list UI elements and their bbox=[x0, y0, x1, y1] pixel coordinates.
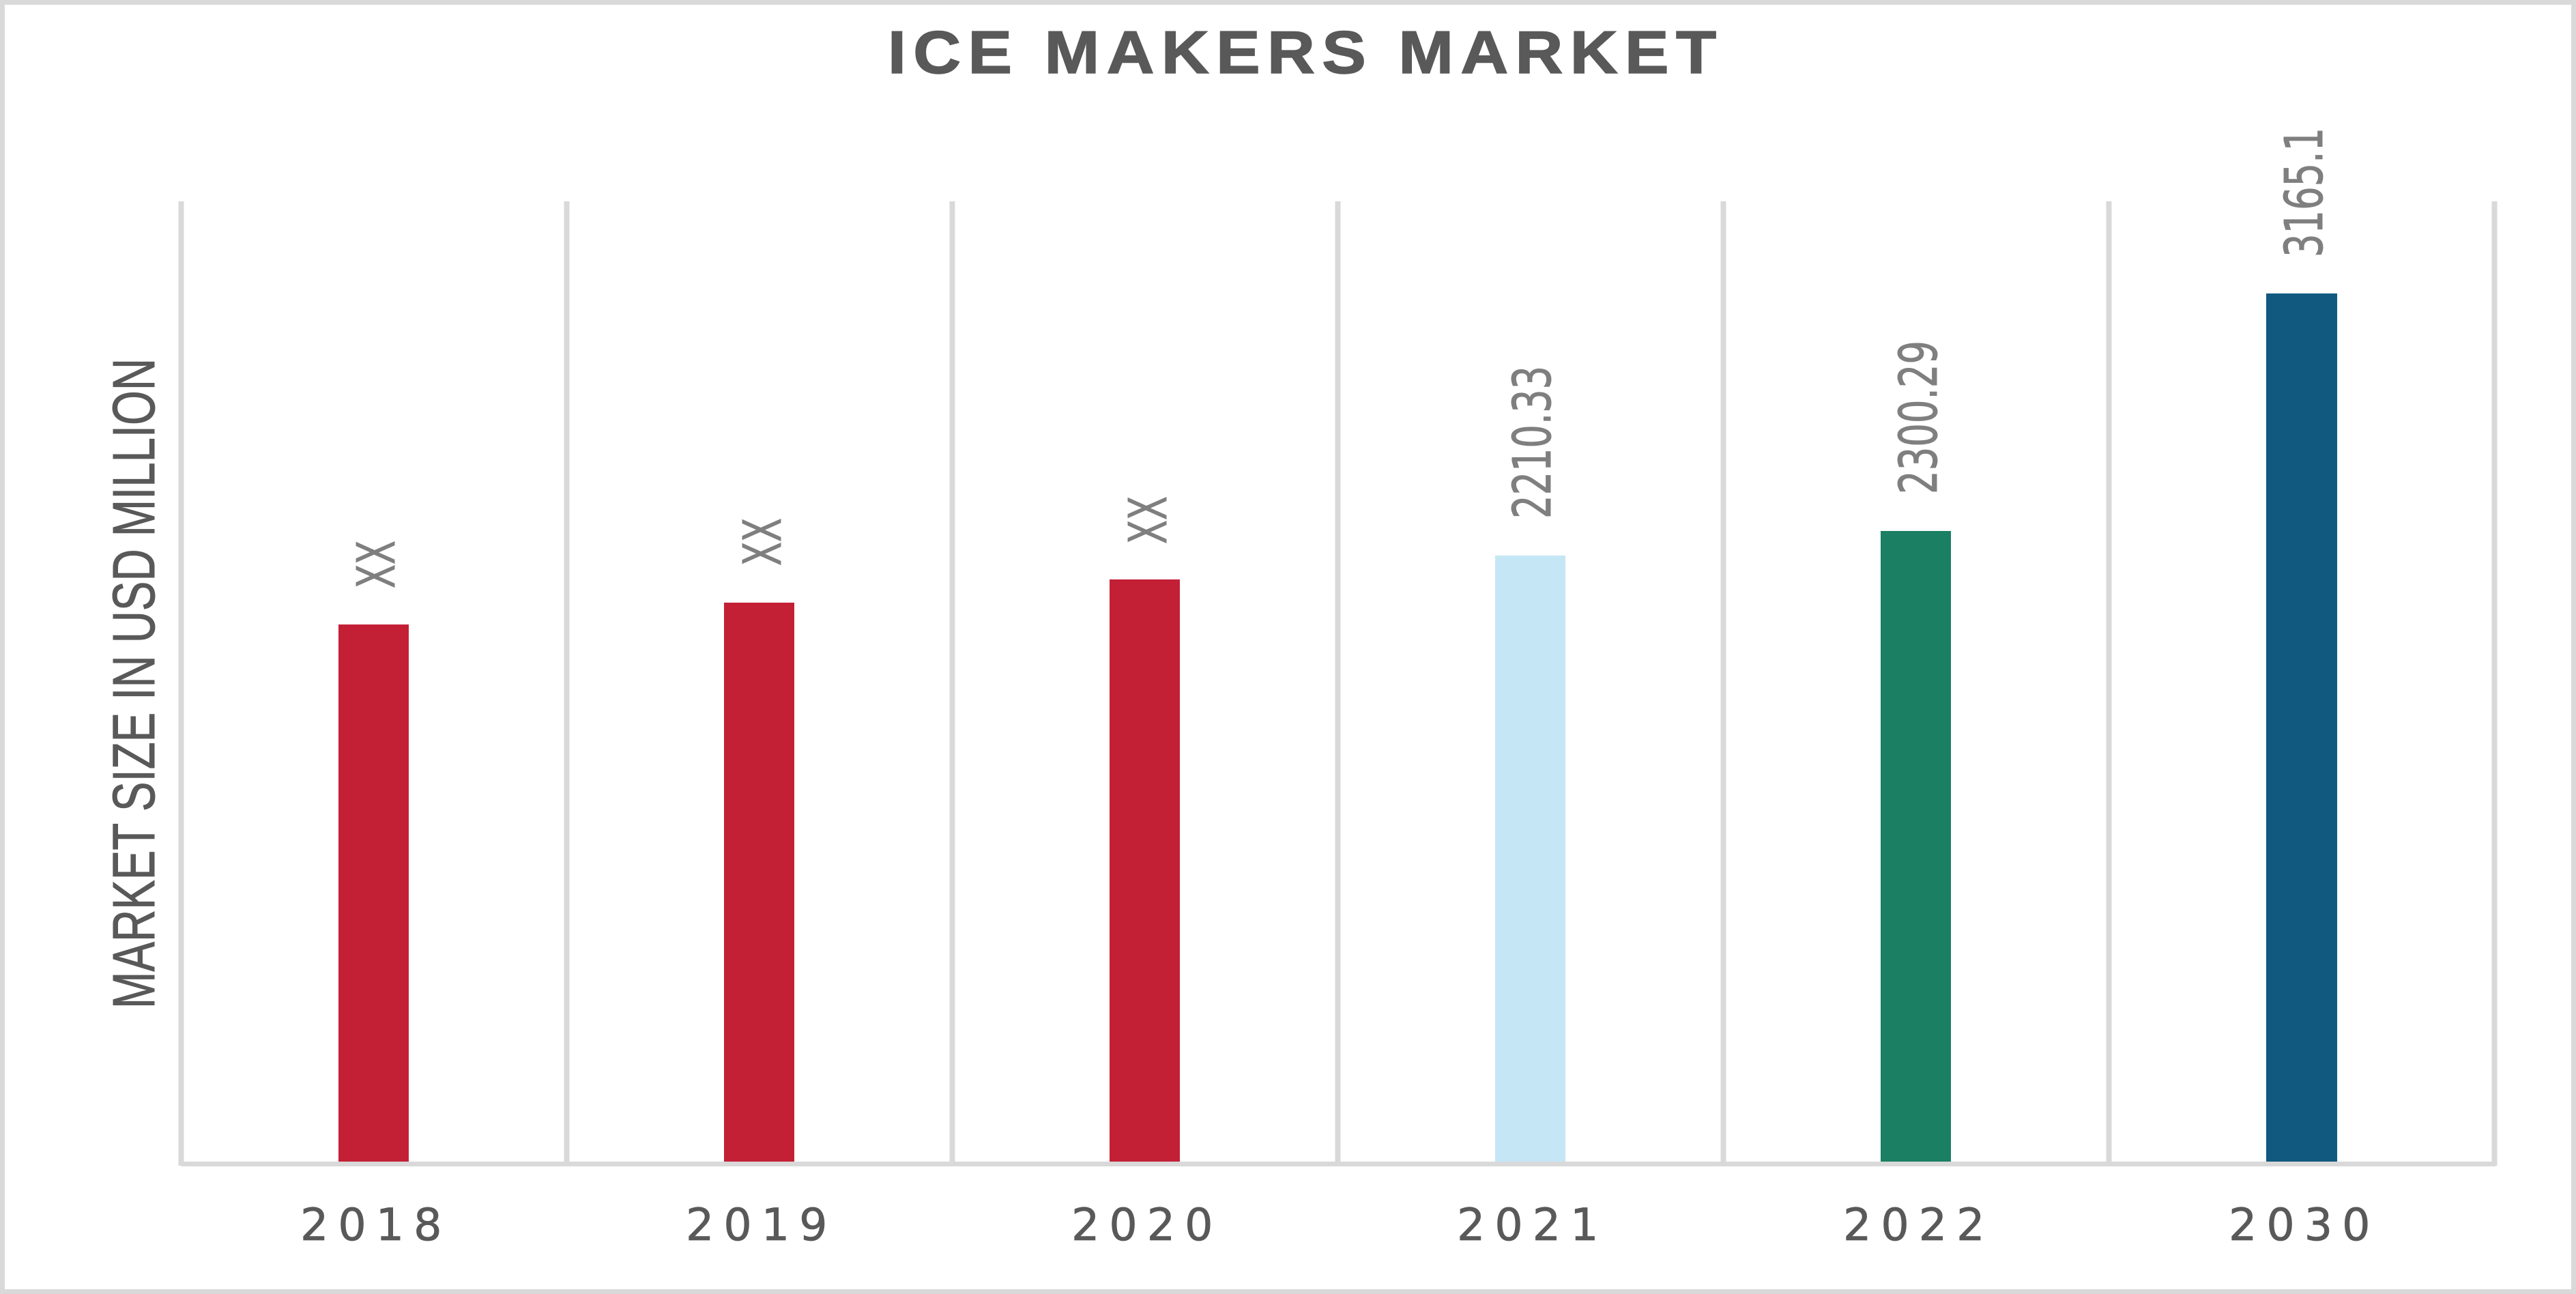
x-axis labels: 2030 bbox=[2229, 1200, 2379, 1251]
x-axis labels: 2022 bbox=[1843, 1200, 1994, 1251]
x-axis labels: 2018 bbox=[300, 1200, 451, 1251]
bar 2030 bbox=[2266, 128, 2337, 1162]
x-axis labels: 2020 bbox=[1071, 1200, 1222, 1251]
bar 2019 bbox=[724, 518, 794, 1162]
y-axis title: MARKET SIZE IN USD MILLION bbox=[101, 358, 167, 1009]
value label 2021: 2210.33 bbox=[1503, 366, 1563, 519]
x-axis labels: 2021 bbox=[1457, 1200, 1608, 1251]
value label 2018: XX bbox=[347, 541, 407, 588]
x-axis labels: 2019 bbox=[686, 1200, 837, 1251]
bar 2020 bbox=[1110, 496, 1180, 1162]
value label 2019: XX bbox=[733, 518, 794, 566]
bar 2018 bbox=[338, 541, 409, 1162]
x-axis labels bbox=[300, 1200, 2379, 1251]
value label 2022: 2300.29 bbox=[1889, 341, 1950, 494]
bar 2022 bbox=[1881, 341, 1951, 1162]
bar 2021 bbox=[1495, 366, 1565, 1162]
value label 2020: XX bbox=[1118, 496, 1179, 544]
title: ICE MAKERS MARKET bbox=[888, 18, 1723, 86]
value label 2030: 3165.1 bbox=[2274, 128, 2335, 257]
